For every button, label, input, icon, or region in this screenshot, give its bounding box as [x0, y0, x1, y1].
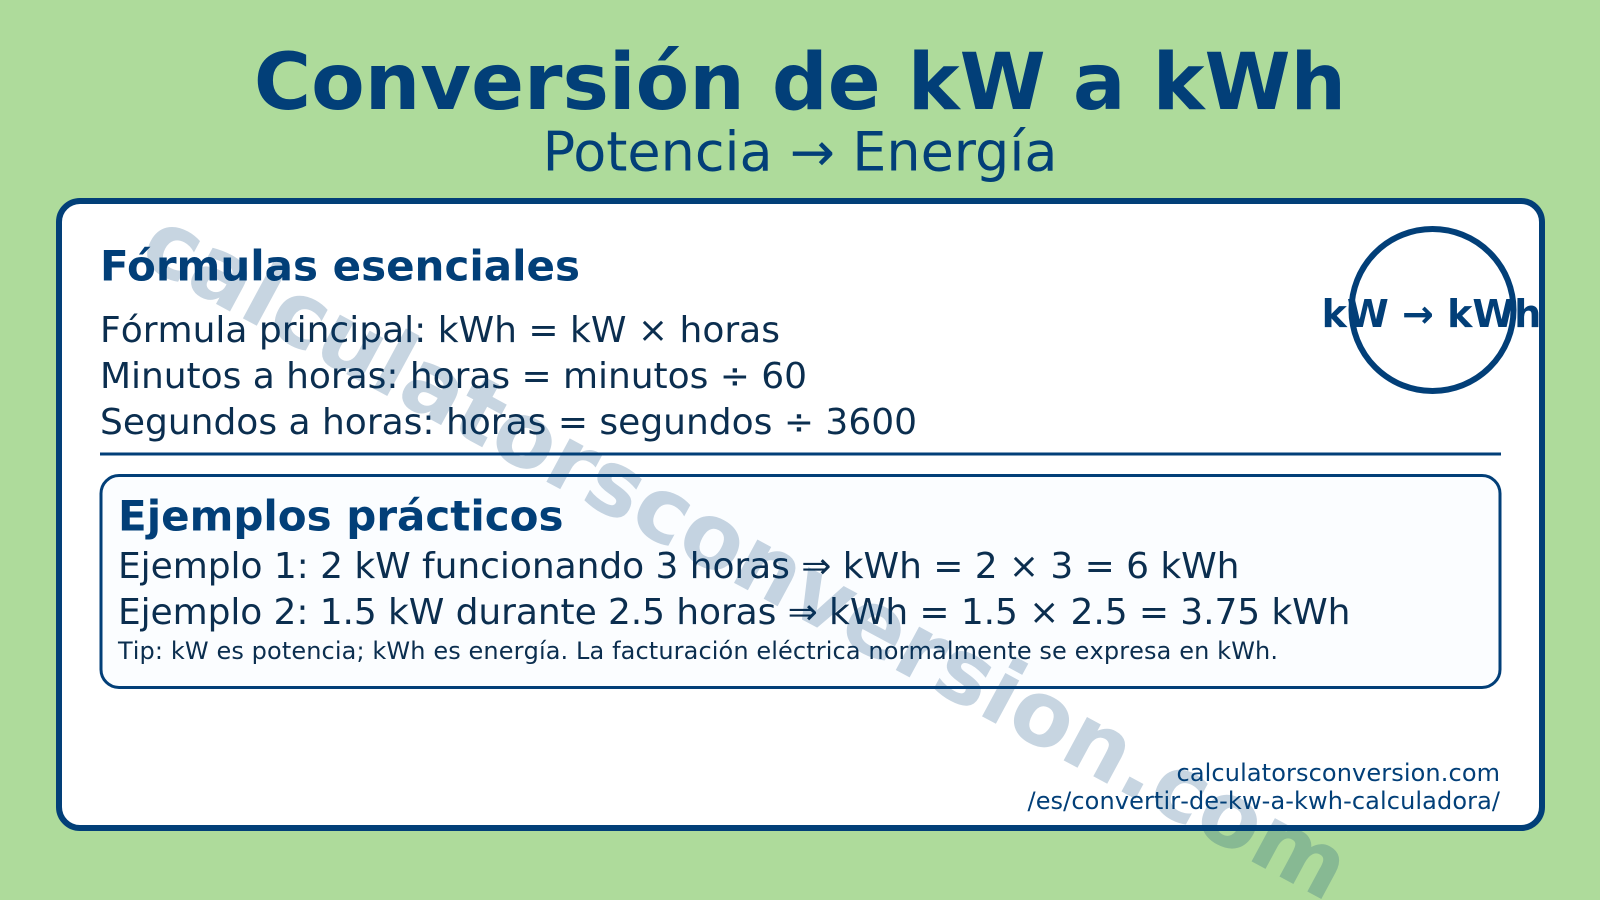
title: Conversión de kW a kWh [254, 38, 1346, 128]
watermark: calculatorsconversion.com [125, 188, 1367, 900]
text block: examples: Ejemplo 2: 1.5 kW durante 2.5 horas ⇒ kWh = 1.5 × 2.5 = 3.75 kWh [118, 592, 1350, 633]
footer: site url: /es/convertir-de-kw-a-kwh-calculadora/ [1028, 787, 1501, 815]
heading: fórmulas esenciales: Fórmulas esenciales [100, 242, 580, 290]
icon: kW to kWh circle badge: kW → kWh [1322, 292, 1541, 336]
panel: ejemplos prácticos [101, 476, 1500, 688]
heading: ejemplos prácticos: Ejemplos prácticos [118, 492, 564, 540]
text block: examples [118, 546, 1350, 633]
panel: main card [59, 201, 1542, 828]
text block: examples: Ejemplo 1: 2 kW funcionando 3 horas ⇒ kWh = 2 × 3 = 6 kWh [118, 546, 1240, 587]
footer: site url: calculatorsconversion.com [1176, 759, 1500, 787]
icon: kW to kWh circle badge [1322, 229, 1541, 391]
text block: formulas: Segundos a horas: horas = segundos ÷ 3600 [100, 402, 917, 443]
text block: formulas [100, 310, 917, 443]
subtitle: Potencia → Energía [543, 120, 1057, 184]
footer: site url [1028, 759, 1501, 815]
text block: formulas: Minutos a horas: horas = minutos ÷ 60 [100, 356, 807, 397]
text block: formulas: Fórmula principal: kWh = kW × horas [100, 310, 780, 351]
text block: tip: Tip: kW es potencia; kWh es energía. La facturación eléctrica normalmente se expresa en kWh. [117, 637, 1278, 665]
